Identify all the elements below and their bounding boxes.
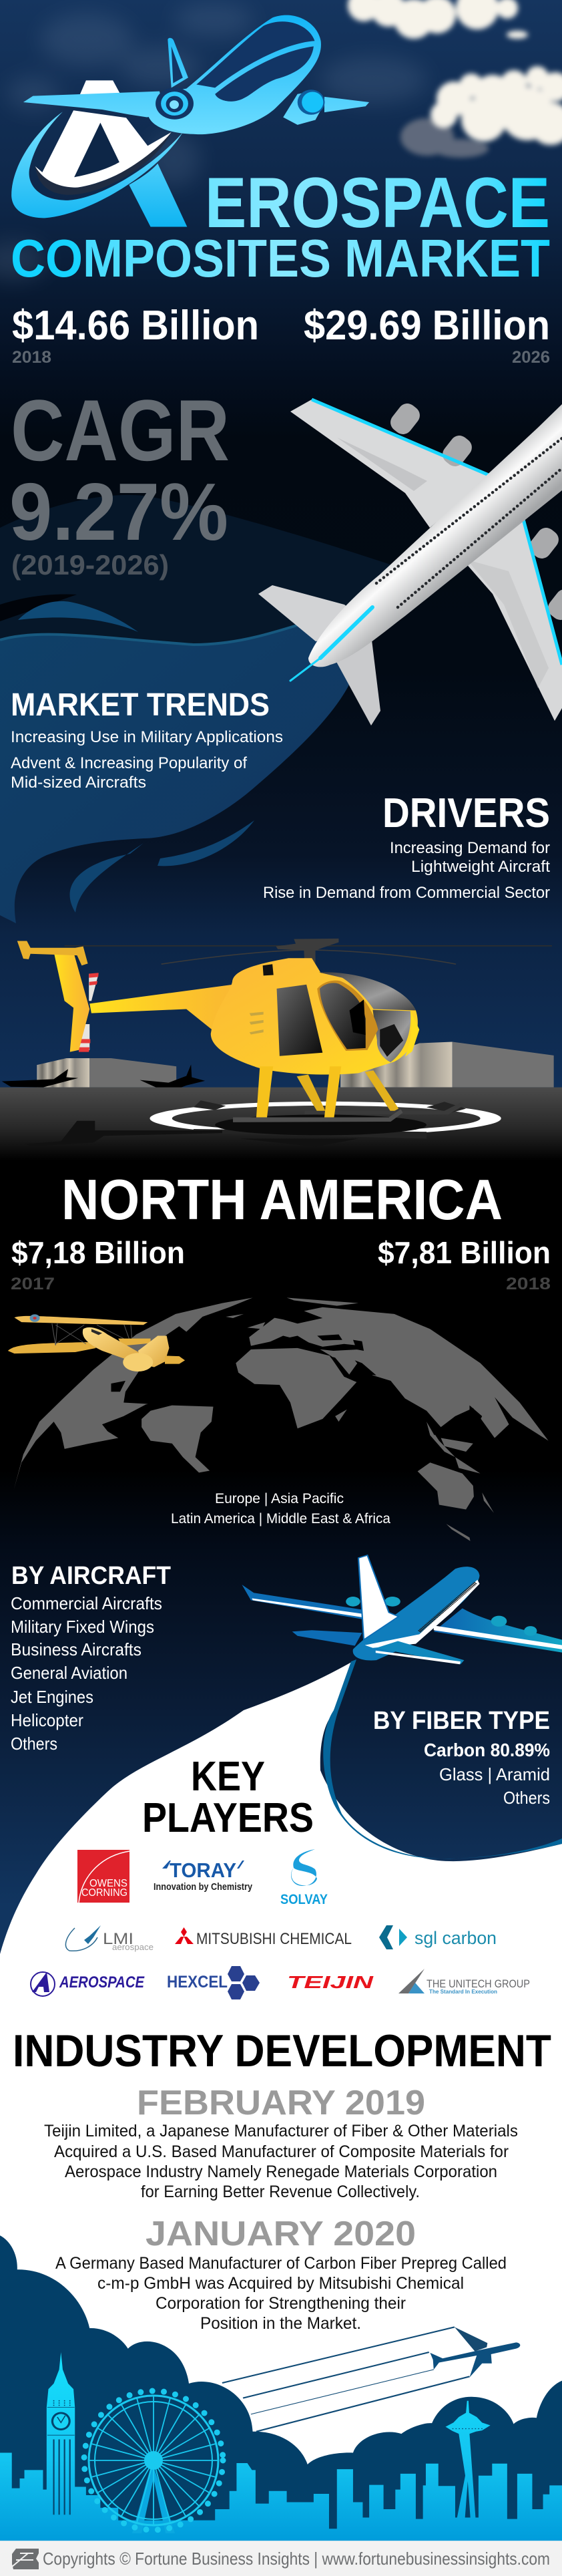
Big Ben tower xyxy=(47,2352,75,2517)
February 2019 item: Teijin Limited, a Japanese Manufacturer of Fiber & Other Materials xyxy=(44,2122,518,2140)
logo: Toray: Innovation by Chemistry xyxy=(154,1881,253,1893)
logo: Teijin: TEIJIN xyxy=(287,1972,374,1992)
other regions: Latin America | Middle East & Africa xyxy=(171,1511,390,1526)
by aircraft list xyxy=(11,1562,171,1754)
logo: Mitsubishi Chemical: MITSUBISHI CHEMICAL xyxy=(196,1930,352,1948)
by aircraft list: Military Fixed Wings xyxy=(11,1617,154,1637)
north america 2017: 2017 xyxy=(11,1275,55,1293)
space needle xyxy=(445,2401,491,2535)
CAGR: 9.27% xyxy=(9,466,228,557)
logo: Owens Corning xyxy=(77,1850,129,1903)
CAGR xyxy=(9,381,230,581)
drivers: Increasing Demand for xyxy=(390,839,550,857)
February 2019 item: FEBRUARY 2019 xyxy=(137,2084,425,2122)
drivers: Lightweight Aircraft xyxy=(411,858,550,876)
tail xyxy=(17,941,254,1052)
footer bar xyxy=(0,2541,562,2576)
logo: SGL Carbon: sgl carbon xyxy=(414,1928,497,1948)
helipad marking xyxy=(25,1100,501,1147)
clouds xyxy=(0,0,562,281)
north america 2017: $7,18 Billion xyxy=(11,1235,185,1270)
market trends: Advent & Increasing Popularity of xyxy=(11,754,247,772)
logo: Toray xyxy=(154,1859,253,1893)
by fiber type list: Others xyxy=(503,1788,550,1808)
logo: Hexcel xyxy=(167,1966,260,1999)
market size 2018 xyxy=(12,303,259,367)
world globe xyxy=(13,1297,549,1541)
market size 2026 xyxy=(304,303,550,367)
February 2019 item xyxy=(44,2084,518,2201)
key players heading: KEY xyxy=(191,1754,265,1800)
by aircraft list: General Aviation xyxy=(11,1663,127,1683)
by fiber type list: BY FIBER TYPE xyxy=(373,1707,550,1735)
logo: Aerospace: AEROSPACE xyxy=(59,1973,145,1991)
skids xyxy=(233,1066,464,1122)
February 2019 item: for Earning Better Revenue Collectively. xyxy=(141,2183,420,2201)
fuselage xyxy=(211,958,418,1074)
by fiber type list: Carbon 80.89% xyxy=(424,1740,550,1760)
CAGR: CAGR xyxy=(11,381,230,479)
logo: LMI Aerospace: aerospace xyxy=(112,1942,154,1952)
by fiber type list xyxy=(373,1707,550,1808)
logo: Hexcel: HEXCEL xyxy=(167,1973,228,1991)
logo: Unitech Group xyxy=(398,1969,530,1995)
February 2019 item: Acquired a U.S. Based Manufacturer of Composite Materials for xyxy=(54,2142,509,2161)
logo: aeroplane and letter A xyxy=(11,15,369,226)
January 2020 item: Position in the Market. xyxy=(200,2314,361,2333)
white lower background xyxy=(0,1659,562,2576)
key players heading: PLAYERS xyxy=(142,1795,314,1841)
doors xyxy=(250,964,378,1056)
drivers xyxy=(263,790,550,902)
by aircraft list: Commercial Aircrafts xyxy=(11,1593,162,1613)
north america heading: NORTH AMERICA xyxy=(61,1168,503,1232)
key players heading xyxy=(142,1754,314,1841)
logo: Unitech Group: THE UNITECH GROUP xyxy=(427,1977,530,1990)
logo: Aerospace xyxy=(31,1972,145,1996)
large airliner xyxy=(258,399,562,726)
city skyline xyxy=(0,2352,562,2541)
logo: Solvay xyxy=(280,1849,328,1907)
title xyxy=(11,162,550,288)
by aircraft list: Business Aircrafts xyxy=(11,1639,142,1659)
by aircraft list: Jet Engines xyxy=(11,1687,93,1707)
logo: Solvay: SOLVAY xyxy=(280,1892,328,1907)
by fiber type list: Glass | Aramid xyxy=(439,1764,550,1784)
north america 2018 xyxy=(378,1235,551,1293)
logo: Toray: TORAY xyxy=(170,1859,236,1882)
logo: LMI Aerospace: LMI xyxy=(103,1930,133,1948)
rotor xyxy=(65,939,552,964)
blue airliner xyxy=(242,1555,562,1664)
hangars xyxy=(2,1041,554,1088)
logo: Owens Corning: OWENS xyxy=(89,1878,127,1889)
February 2019 item: Aerospace Industry Namely Renegade Materials Corporation xyxy=(65,2162,497,2181)
canopy xyxy=(319,972,416,1011)
by aircraft list: Helicopter xyxy=(11,1710,83,1730)
January 2020 item: c-m-p GmbH was Acquired by Mitsubishi Chemical xyxy=(97,2274,464,2293)
north america 2018: 2018 xyxy=(506,1275,551,1293)
logo: SGL Carbon xyxy=(379,1925,497,1949)
logo: Unitech Group: The Standard In Execution xyxy=(429,1989,497,1995)
logo: LMI Aerospace xyxy=(65,1925,154,1952)
ferris wheel xyxy=(84,2391,223,2533)
footer logo xyxy=(12,2549,39,2569)
January 2020 item: JANUARY 2020 xyxy=(146,2215,416,2253)
other regions: Europe | Asia Pacific xyxy=(215,1491,344,1506)
market trends: MARKET TRENDS xyxy=(11,687,270,723)
market size 2026: $29.69 Billion xyxy=(304,303,550,349)
buildings xyxy=(0,2453,562,2541)
market trends xyxy=(11,687,283,792)
north america 2017 xyxy=(11,1235,185,1293)
logo: Owens Corning: CORNING xyxy=(81,1887,127,1899)
market size 2018: $14.66 Billion xyxy=(12,303,259,349)
apron xyxy=(0,1088,562,1161)
contrails and small jet xyxy=(222,2327,520,2432)
CAGR: (2019-2026) xyxy=(11,549,169,581)
by aircraft list: Others xyxy=(11,1734,57,1754)
market trends: Mid-sized Aircrafts xyxy=(11,774,146,792)
cloud silhouette xyxy=(0,2235,562,2541)
other regions xyxy=(171,1491,390,1526)
market trends: Increasing Use in Military Applications xyxy=(11,728,283,746)
by aircraft list: BY AIRCRAFT xyxy=(11,1562,171,1590)
wave panel xyxy=(0,495,400,923)
helicopter scene xyxy=(0,939,562,1161)
market size 2018: 2018 xyxy=(12,348,51,367)
January 2020 item: A Germany Based Manufacturer of Carbon Fiber Prepreg Called xyxy=(55,2254,507,2273)
logo: Mitsubishi Chemical xyxy=(175,1927,352,1948)
January 2020 item xyxy=(55,2215,507,2333)
north america 2018: $7,81 Billion xyxy=(378,1235,551,1270)
drivers: Rise in Demand from Commercial Sector xyxy=(263,884,550,902)
drivers: DRIVERS xyxy=(382,790,550,836)
biplane xyxy=(8,1314,185,1372)
January 2020 item: Corporation for Strengthening their xyxy=(156,2294,406,2313)
market size 2026: 2026 xyxy=(512,348,550,367)
